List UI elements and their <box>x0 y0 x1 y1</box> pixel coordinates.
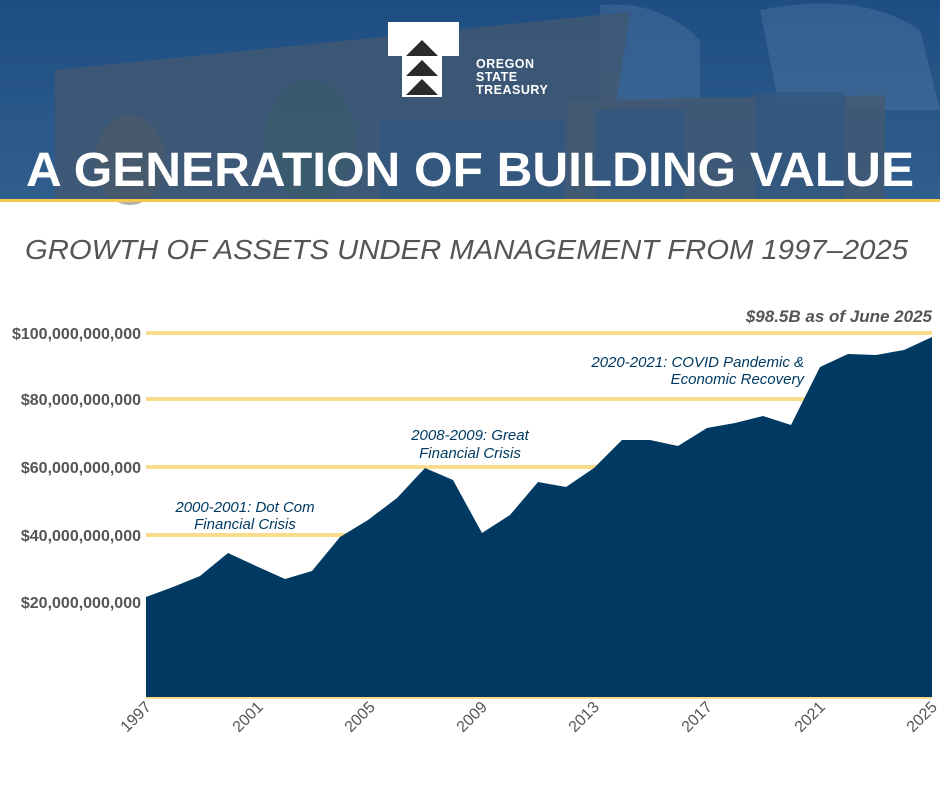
x axis labels: 2001 <box>230 699 267 736</box>
annotation: dot com: 2000-2001: Dot Com <box>174 499 315 516</box>
annotation: great financial crisis <box>410 427 530 462</box>
x axis labels <box>118 699 940 736</box>
x axis labels: 2013 <box>566 699 603 736</box>
annotation: great financial crisis: 2008-2009: Great <box>410 427 530 444</box>
callout: current value: $98.5B as of June 2025 <box>745 307 933 326</box>
area chart <box>146 337 932 697</box>
annotation: dot com: Financial Crisis <box>194 516 296 533</box>
y axis labels <box>12 326 141 612</box>
y axis labels: $100,000,000,000 <box>12 326 141 343</box>
annotation: great financial crisis: Financial Crisis <box>419 445 521 462</box>
x axis labels: 2009 <box>454 699 491 736</box>
y axis labels: $40,000,000,000 <box>21 528 141 545</box>
logo: Oregon State Treasury <box>388 22 548 97</box>
x axis labels: 2017 <box>679 699 716 736</box>
logo: Oregon State Treasury: TREASURY <box>476 83 548 97</box>
annotation: covid <box>590 354 805 388</box>
x axis labels: 2005 <box>342 699 379 736</box>
x axis labels: 2021 <box>792 699 829 736</box>
x axis labels: 1997 <box>118 699 155 736</box>
header banner <box>0 0 940 205</box>
y axis labels: $60,000,000,000 <box>21 460 141 477</box>
annotation: covid: 2020-2021: COVID Pandemic & <box>590 354 804 371</box>
x axis labels: 2025 <box>904 699 940 736</box>
gridlines <box>146 333 932 697</box>
subtitle: GROWTH OF ASSETS UNDER MANAGEMENT FROM 1997–2025 <box>25 234 908 265</box>
logo: Oregon State Treasury: OREGON <box>476 57 535 71</box>
logo: Oregon State Treasury: STATE <box>476 70 518 84</box>
annotation: covid: Economic Recovery <box>671 371 805 388</box>
y axis labels: $20,000,000,000 <box>21 595 141 612</box>
annotation: dot com <box>174 499 315 533</box>
title: A GENERATION OF BUILDING VALUE <box>26 144 914 197</box>
y axis labels: $80,000,000,000 <box>21 392 141 409</box>
